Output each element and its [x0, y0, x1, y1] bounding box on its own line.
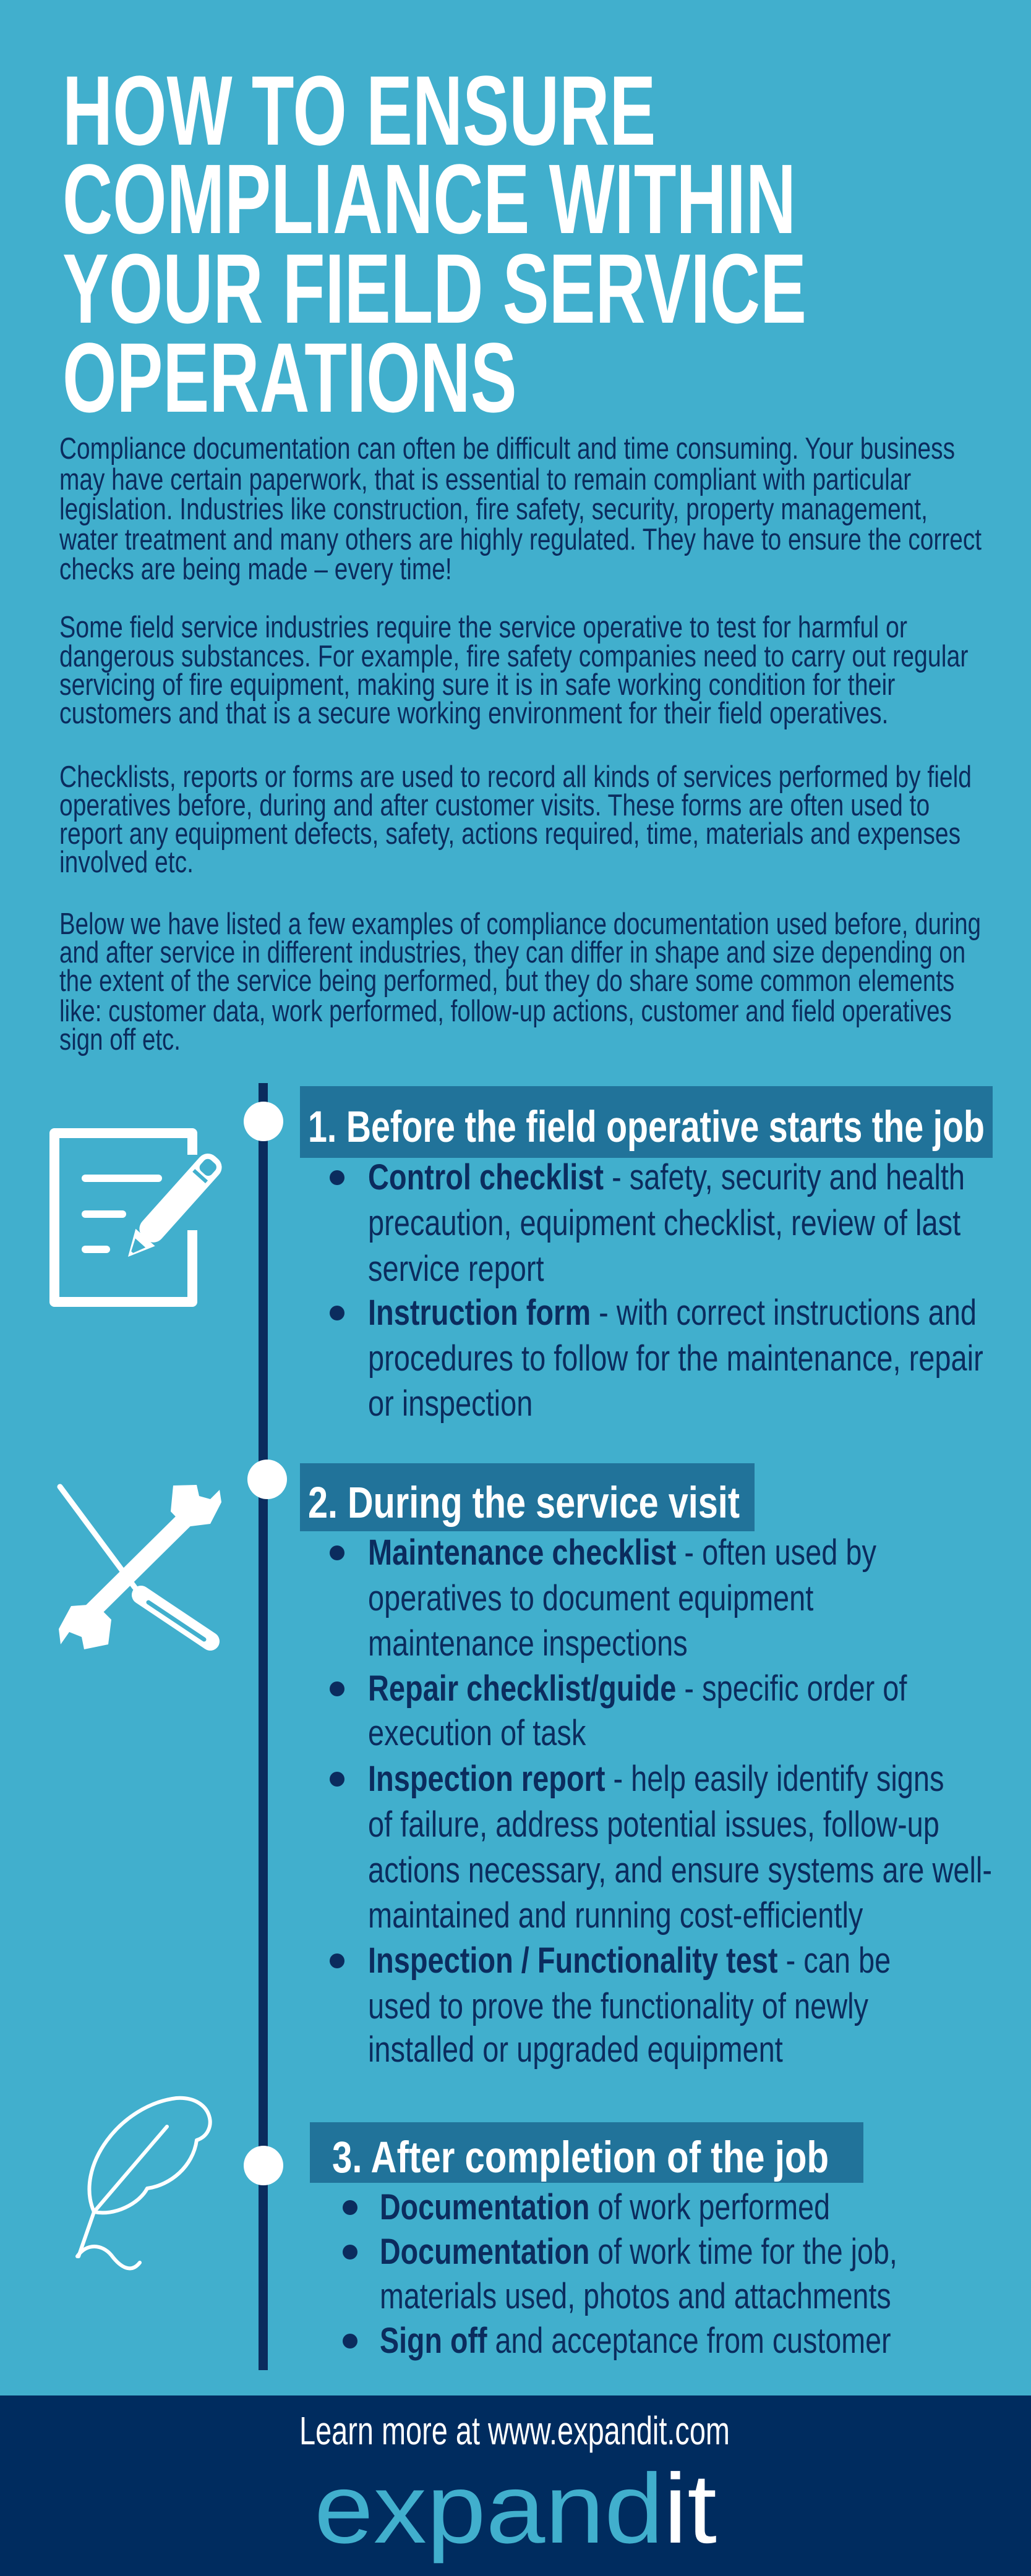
text: execution of task [368, 1713, 586, 1753]
text block: intro paragraph 1: may have certain paperwork, that is essential to remain compliant with particular [59, 463, 911, 496]
title: HOW TO ENSURE [62, 55, 656, 166]
text: maintained and running cost-efficiently [368, 1895, 863, 1936]
text: procedures to follow for the maintenance, repair [368, 1338, 983, 1379]
text block: paragraph 2: dangerous substances. For example, fire safety companies need to carry out regular [59, 640, 969, 673]
text block: paragraph 3: report any equipment defects, safety, actions required, time, materials and expenses [59, 817, 960, 851]
text: Inspection / Functionality test - can be [368, 1941, 891, 1981]
panel header 1 [300, 1086, 993, 1158]
timeline node 3 [244, 2146, 283, 2185]
text block: intro paragraph 1: checks are being made – every time! [59, 553, 452, 586]
title: COMPLIANCE WITHIN [62, 143, 796, 254]
text: Repair checklist/guide - specific order of [368, 1668, 907, 1709]
text block: paragraph 4: Below we have listed a few examples of compliance documentation used before, during [59, 908, 981, 941]
text: 3. After completion of the job [332, 2133, 829, 2182]
text block: paragraph 2: customers and that is a secure working environment for their field operatives. [59, 697, 888, 730]
text: Documentation of work performed [380, 2187, 830, 2227]
text block: intro paragraph 1 [59, 432, 982, 586]
text: Sign off and acceptance from customer [380, 2321, 891, 2361]
panel header 3 [310, 2122, 863, 2183]
text block: intro paragraph 1: Compliance documentation can often be difficult and time consuming. Your business [59, 432, 955, 465]
bullets: section 1 [330, 1170, 344, 1320]
timeline line [259, 1083, 268, 2370]
footer [0, 2395, 1031, 2576]
text: operatives to document equipment [368, 1578, 813, 1618]
text block: paragraph 2: servicing of fire equipment, making sure it is in safe working condition for their [59, 668, 895, 702]
text: precaution, equipment checklist, review of last [368, 1203, 960, 1243]
text block: paragraph 3: operatives before, during and after customer visits. These forms are often used to [59, 789, 930, 822]
text block: paragraph 4: the extent of the service being performed, but they do share some common elements [59, 964, 954, 998]
text: Documentation of work time for the job, [380, 2232, 897, 2272]
text block: intro paragraph 1: legislation. Industries like construction, fire safety, security, property management, [59, 493, 928, 526]
timeline node 2 [247, 1460, 287, 1499]
icon: checklist with pencil [49, 1128, 222, 1307]
text: materials used, photos and attachments [380, 2276, 891, 2316]
text block: paragraph 4: like: customer data, work performed, follow-up actions, customer and field operatives [59, 995, 952, 1028]
text: maintenance inspections [368, 1623, 688, 1664]
text: actions necessary, and ensure systems are well- [368, 1850, 992, 1890]
footer link text: Learn more at www.expandit.com [299, 2408, 730, 2453]
text: installed or upgraded equipment [368, 2030, 783, 2070]
title [62, 55, 806, 433]
text block: paragraph 3 [59, 760, 972, 879]
text block: paragraph 2: Some field service industries require the service operative to test for harmful or [59, 611, 907, 644]
text block: paragraph 3: Checklists, reports or forms are used to record all kinds of services performed by field [59, 760, 972, 794]
text block: paragraph 3: involved etc. [59, 846, 194, 879]
text: service report [368, 1249, 544, 1289]
bullets: section 2 [330, 1545, 344, 1968]
icon: wrench and screwdriver [57, 1484, 221, 1651]
text: or inspection [368, 1384, 533, 1424]
panel header 2 [300, 1463, 755, 1531]
text block: paragraph 4: sign off etc. [59, 1023, 181, 1056]
logo: expandit: expandit [314, 2453, 717, 2564]
text: Control checklist - safety, security and health [368, 1157, 965, 1197]
text block: intro paragraph 1: water treatment and many others are highly regulated. They have to ensure the correct [59, 523, 982, 556]
title: OPERATIONS [62, 322, 517, 433]
text: Instruction form - with correct instructions and [368, 1293, 977, 1333]
text: 2. During the service visit [308, 1479, 740, 1528]
text: used to prove the functionality of newly [368, 1986, 868, 2026]
text: Inspection report - help easily identify signs [368, 1759, 944, 1799]
text block: paragraph 2 [59, 611, 969, 730]
text block: paragraph 4: and after service in different industries, they can differ in shape and size depending on [59, 936, 965, 969]
text block: paragraph 4 [59, 908, 981, 1056]
title: YOUR FIELD SERVICE [62, 233, 806, 344]
text: Maintenance checklist - often used by [368, 1532, 876, 1573]
icon: feather quill [75, 2096, 212, 2270]
timeline node 1 [244, 1102, 283, 1141]
text: 1. Before the field operative starts the job [308, 1103, 985, 1152]
text: of failure, address potential issues, follow-up [368, 1804, 939, 1845]
bullets: section 3 [343, 2200, 357, 2349]
